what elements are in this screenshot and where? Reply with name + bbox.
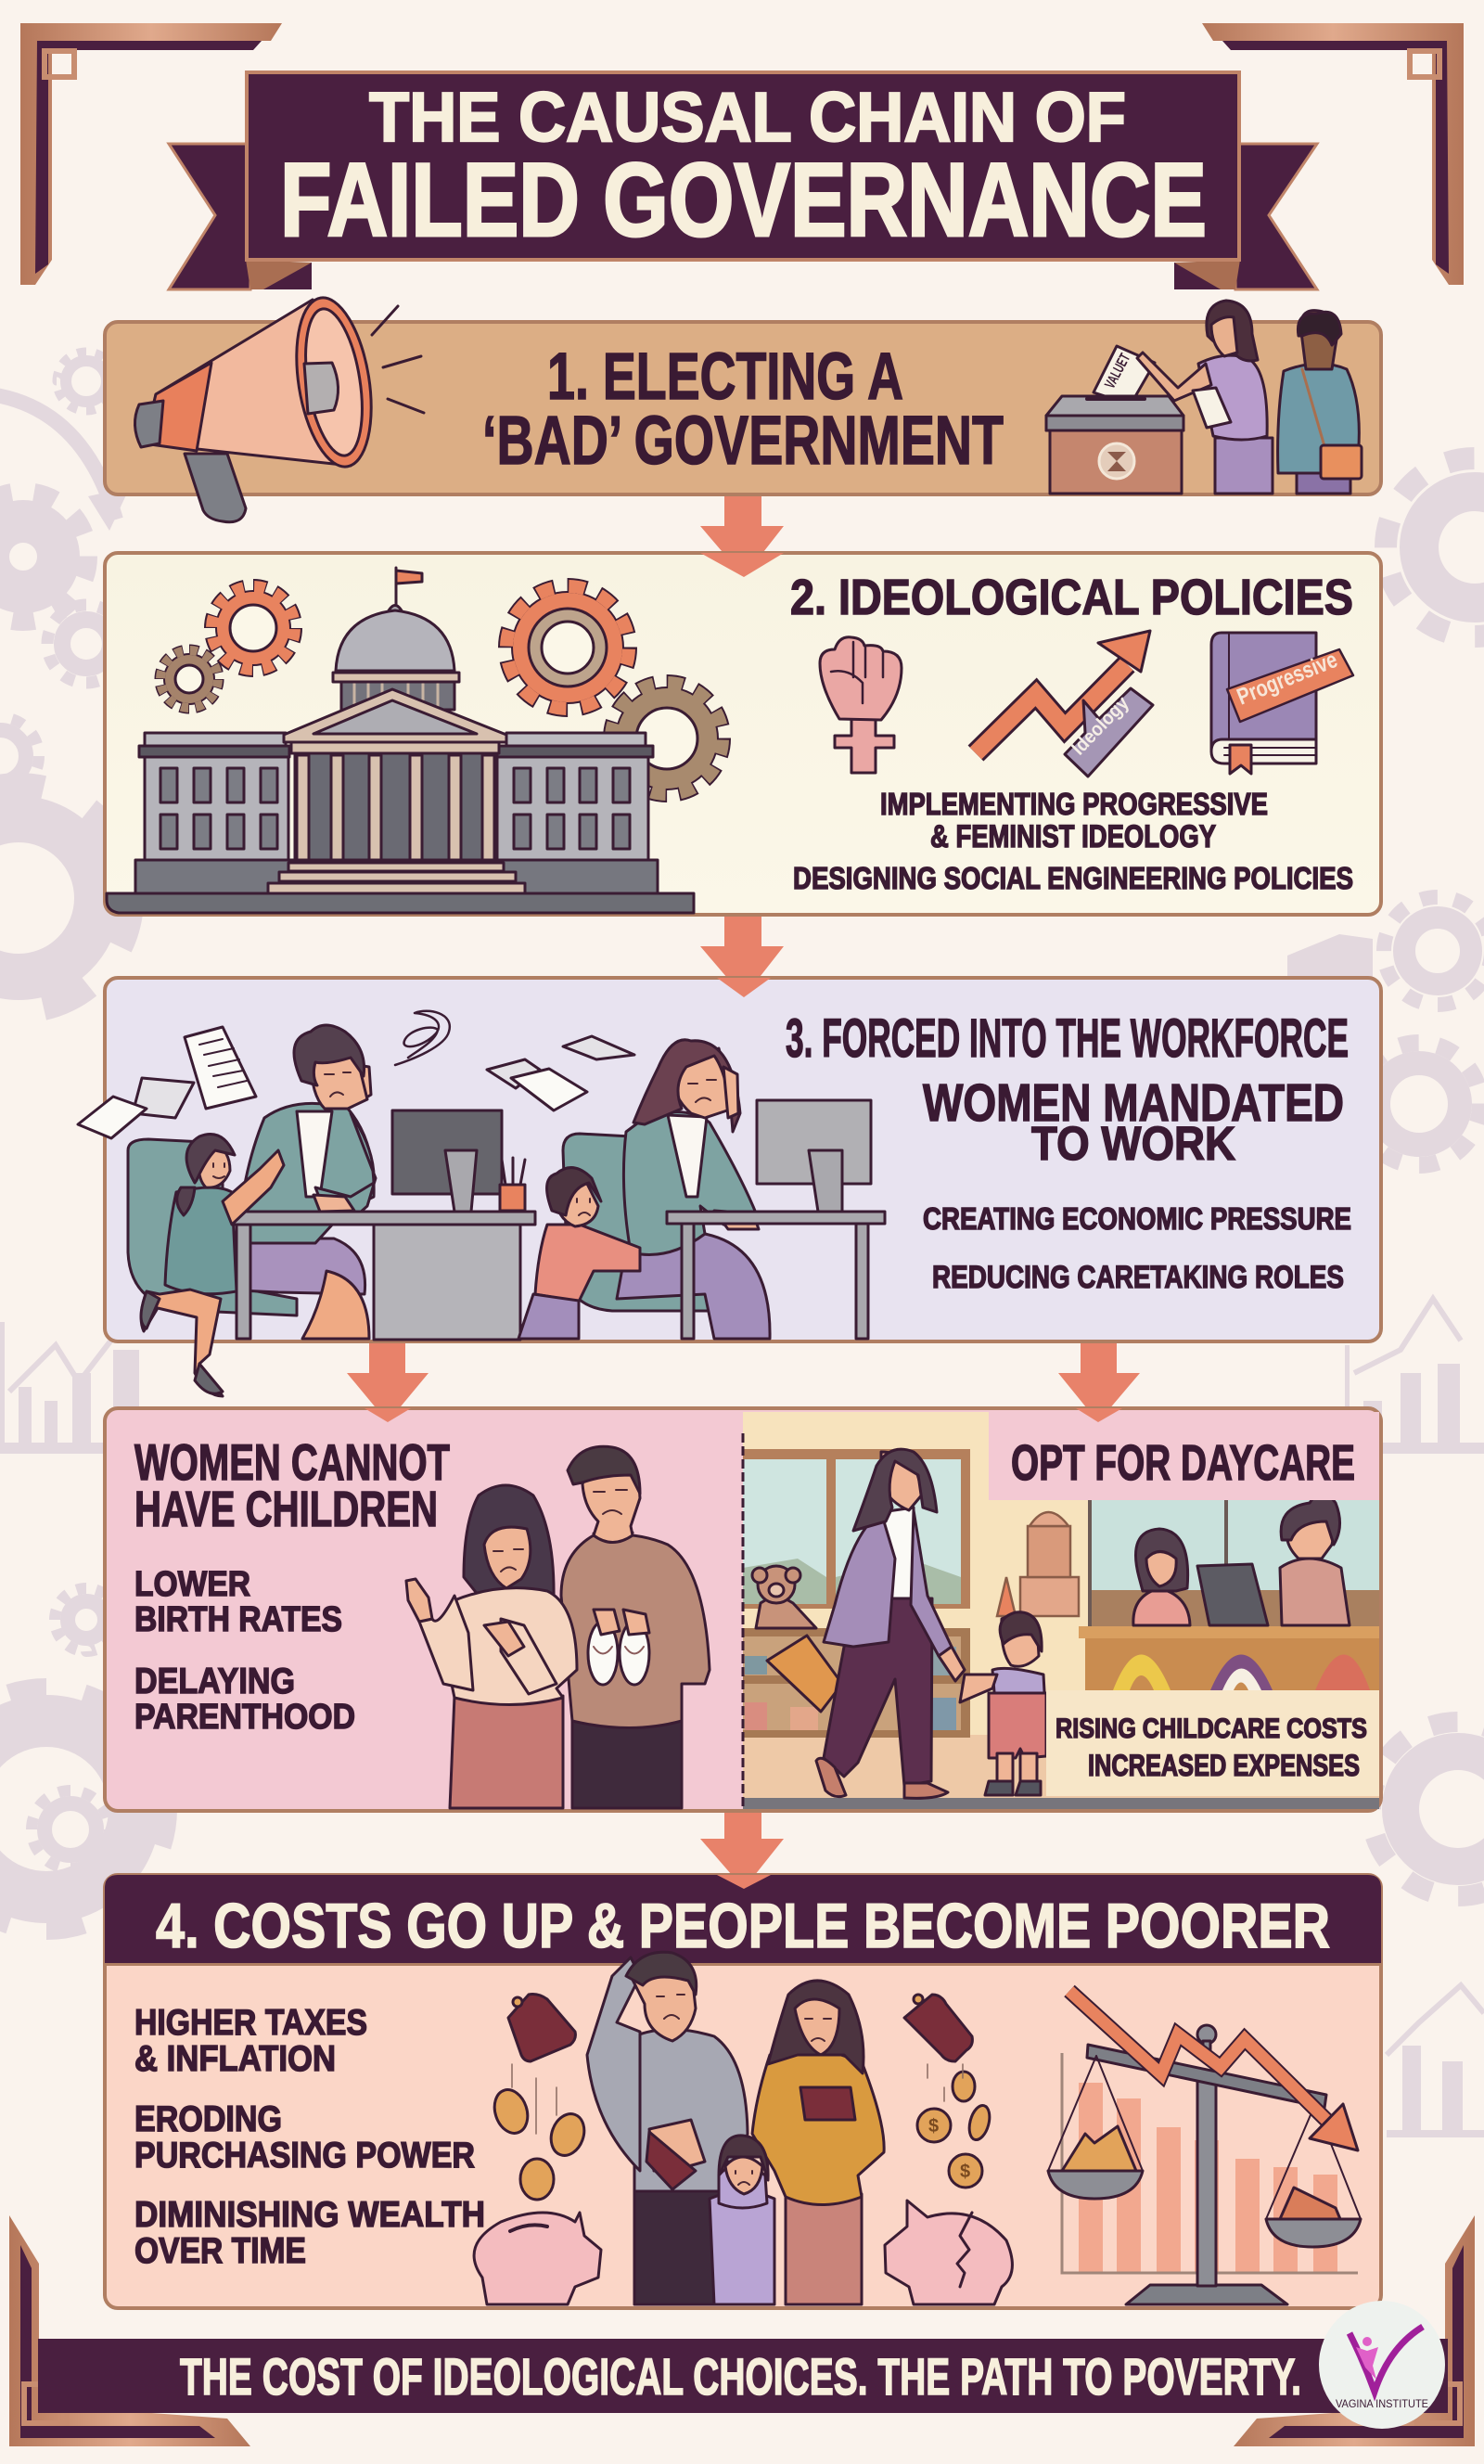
title line 1: THE CAUSAL CHAIN OF (369, 78, 1126, 156)
illustration: rear window and reception desk (1079, 1500, 1379, 1692)
illustration: sad couple holding baby shoes (406, 1446, 710, 1808)
illustration: worried family (587, 1952, 884, 2304)
chart: falling bars (1062, 2053, 1358, 2273)
footer bar (38, 2339, 1448, 2413)
background: chart icons (0, 934, 1484, 2137)
illustration: flying papers and stress scribble (78, 1011, 634, 1138)
text: workforce heading and lines: WOMEN MANDATED (923, 1073, 1344, 1133)
text: cost bullets: & INFLATION (134, 2039, 336, 2079)
text: policy lines (793, 787, 1353, 895)
icon: falling wallets and coins: $ (960, 2162, 970, 2182)
logo text: VAGINA INSTITUTE (1336, 2397, 1428, 2410)
arrow tip overlay (717, 978, 771, 997)
icon: left piggy bank (474, 2213, 601, 2304)
icon: downward zigzag arrow (1069, 1991, 1358, 2150)
arrow: to step 4 (700, 1812, 784, 1889)
icon: progressive book: Progressive (1234, 647, 1341, 711)
title line 2: FAILED GOVERNANCE (280, 142, 1207, 258)
icon: toy tower (997, 1512, 1079, 1616)
logo mark (1350, 2327, 1423, 2392)
icon: ballot box (1046, 346, 1183, 494)
text: cost bullets: OVER TIME (134, 2231, 306, 2271)
text: women cannot have children: LOWER (134, 1565, 250, 1604)
arrow: step 3 to left (347, 1342, 429, 1422)
text: cost bullets: ERODING (134, 2099, 282, 2139)
corner ornament: bottom left (9, 2215, 250, 2446)
label: opt for daycare (989, 1412, 1379, 1500)
icon: tilted scale (1048, 2025, 1361, 2304)
text: workforce heading and lines: TO WORK (1031, 1117, 1235, 1170)
text: cost bullets: HIGHER TAXES (134, 2003, 367, 2043)
icon: ideology tag (1065, 688, 1153, 776)
text: policy lines: & FEMINIST IDEOLOGY (930, 819, 1216, 854)
label: childcare costs: RISING CHILDCARE COSTS (1055, 1713, 1367, 1744)
text: women cannot have children (134, 1433, 450, 1737)
text: policy lines: DESIGNING SOCIAL ENGINEERING POLICIES (793, 861, 1353, 895)
background: decorative gears and charts (0, 352, 1484, 1930)
heading: electing a bad government: ‘BAD’ GOVERNMENT (482, 402, 1004, 479)
icon: falling wallets and coins: $ (928, 2116, 939, 2137)
panel: step 2 ideological policies (105, 553, 1381, 915)
text: women cannot have children: HAVE CHILDREN (134, 1482, 438, 1537)
text: cost bullets: DIMINISHING WEALTH (134, 2195, 485, 2235)
text: women cannot have children: BIRTH RATES (134, 1600, 342, 1639)
icon: ballot box: VALUET (1103, 351, 1133, 391)
icon: megaphone (134, 292, 424, 522)
illustration: capitol building (107, 568, 694, 913)
text: cost bullets (134, 2003, 485, 2271)
panel: right daycare scene (743, 1412, 1379, 1809)
icon: two voters (1137, 301, 1362, 494)
illustration: window (743, 1449, 970, 1609)
text: women cannot have children: WOMEN CANNOT (134, 1433, 450, 1491)
icon: teddy bear (752, 1566, 816, 1628)
label: childcare costs (1046, 1690, 1379, 1796)
icon: small brown gear (160, 650, 218, 708)
icon: large brown gear (611, 683, 723, 794)
heading: electing a bad government (482, 340, 1004, 479)
logo: institute badge (1319, 2301, 1445, 2429)
label: childcare costs: INCREASED EXPENSES (1088, 1749, 1360, 1782)
text: women cannot have children: DELAYING (134, 1662, 295, 1701)
arrow: step 2 to 3 (700, 916, 784, 997)
panel: outcomes split (105, 1408, 1381, 1811)
icon: small orange gear (212, 587, 294, 669)
text: cost bullets: PURCHASING POWER (134, 2136, 475, 2175)
icon: falling wallets and coins (489, 1995, 993, 2200)
title banner (169, 72, 1317, 289)
icon: feminist fist (820, 637, 902, 773)
illustration: bookshelf (743, 1628, 970, 1738)
text: workforce heading and lines (786, 1008, 1351, 1295)
panel: step 4 costs go up (105, 1875, 1381, 2308)
panel: step 3 forced into workforce (78, 978, 1381, 1396)
text: workforce heading and lines: REDUCING CARETAKING ROLES (932, 1260, 1344, 1295)
divider: dashed line (742, 1433, 744, 1809)
arrow tip overlays (365, 1408, 1122, 1422)
icon: broken piggy bank (885, 2201, 1012, 2304)
corner ornament: top right (1202, 23, 1464, 285)
illustration: stressed mother at desk with daughter (128, 1025, 535, 1396)
illustration: mother walking with son (767, 1449, 1046, 1798)
arrow: step 3 to right (1058, 1342, 1140, 1422)
corner ornament: top left (20, 23, 282, 285)
icon: rising zigzag arrow (976, 631, 1150, 753)
text: workforce heading and lines: CREATING ECONOMIC PRESSURE (923, 1201, 1351, 1236)
icon: ideology tag: Ideology (1068, 692, 1133, 759)
illustration: stressed mother at desk with son (518, 1040, 885, 1339)
text: women cannot have children: PARENTHOOD (134, 1698, 355, 1737)
icon: progressive book (1211, 633, 1353, 774)
text: policy lines: IMPLEMENTING PROGRESSIVE (880, 787, 1268, 821)
arrow tip overlay (700, 553, 784, 577)
icon: large orange gear (506, 586, 629, 709)
heading: ideological policies: 2. IDEOLOGICAL POLICIES (790, 570, 1353, 625)
illustration: daycare staff (1133, 1494, 1350, 1625)
arrow: step 1 to 2 (700, 495, 784, 577)
panel: step 1 electing (105, 292, 1381, 522)
label: opt for daycare: OPT FOR DAYCARE (1011, 1435, 1355, 1491)
corner ornament: bottom right (1234, 2215, 1475, 2446)
heading: electing a bad government: 1. ELECTING A (547, 340, 903, 414)
